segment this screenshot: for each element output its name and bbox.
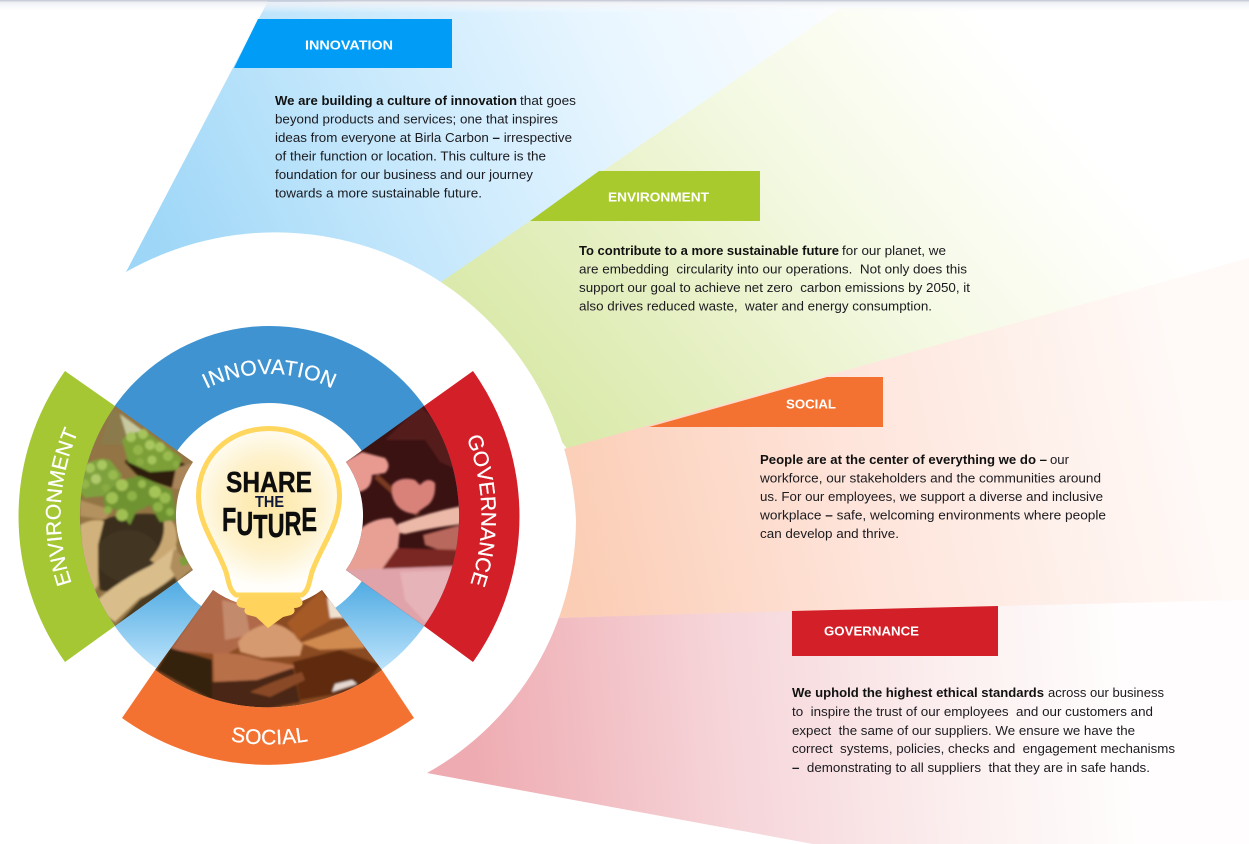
panel: social [649, 377, 1106, 541]
text block: innovation: ideas from everyone at Birla Carbon – irrespective [275, 130, 572, 145]
text block: governance: to inspire the trust of our employees and our customers and [792, 704, 1153, 719]
text block: governance: – demonstrating to all suppliers that they are in safe hands. [792, 760, 1150, 775]
text block: innovation: towards a more sustainable future. [275, 186, 482, 200]
band: environment: ENVIRONMENT [46, 426, 76, 586]
text block: social: People are at the center of everything we do – [760, 452, 1047, 467]
text block: environment: also drives reduced waste, water and energy consumption. [579, 298, 932, 314]
text block: governance: correct systems, policies, checks and engagement mechanisms [792, 741, 1176, 756]
heading: environment: ENVIRONMENT [608, 190, 709, 204]
text block: innovation: foundation for our business and our journey [275, 167, 534, 182]
band: social [122, 670, 414, 765]
text block: social: our [1050, 452, 1070, 467]
text block: governance [792, 685, 1176, 775]
text block: social: workplace – safe, welcoming environments where people [759, 508, 1106, 522]
text block: social: can develop and thrive. [760, 526, 899, 541]
top edge shadow [0, 2, 1249, 13]
bulb glass [198, 428, 340, 595]
beam: governance [427, 600, 1249, 844]
text block: innovation: of their function or location. This culture is the [275, 148, 546, 164]
text block: innovation: We are building a culture of innovation [275, 93, 517, 108]
heading: social [649, 377, 883, 427]
heading: governance [792, 606, 998, 656]
photo: seedlings in hands [80, 406, 193, 626]
wheel diagram [18, 326, 520, 765]
text block: innovation [275, 93, 577, 200]
photo: stacked hands [155, 590, 382, 708]
blue ring: innovation [80, 326, 460, 670]
panel: governance [792, 606, 1176, 775]
heading: governance: GOVERNANCE [824, 624, 919, 638]
text block: environment: are embedding circularity into our operations. Not only does this [579, 262, 968, 276]
band: governance: GOVERNANCE [468, 435, 496, 588]
panel: environment [530, 171, 970, 314]
text block: environment: To contribute to a more sustainable future [579, 243, 839, 258]
photo: hands with pen and tablet [346, 406, 459, 626]
text block: governance: We uphold the highest ethical standards [792, 685, 1044, 700]
heading: environment [530, 171, 760, 221]
text block: social: us. For our employees, we support a diverse and inclusive [760, 489, 1103, 504]
text block: social [759, 452, 1106, 541]
bulb base [236, 596, 302, 628]
text block: environment [579, 243, 970, 314]
top edge line [0, 0, 1249, 2]
text block: environment: for our planet, we [842, 243, 946, 258]
panel: innovation [234, 19, 577, 200]
text block: social: workforce, our stakeholders and the communities around [759, 470, 1101, 486]
white disc behind the wheel [0, 232, 576, 800]
band: environment [18, 371, 115, 662]
heading: innovation: INNOVATION [305, 38, 393, 52]
slogan: future: FUTURE [222, 502, 317, 546]
beam: environment [441, 8, 1249, 450]
text block: governance: across our business [1048, 685, 1164, 700]
text block: innovation: beyond products and services; one that inspires [275, 112, 558, 126]
beam: social [555, 258, 1249, 618]
text block: governance: expect the same of our suppliers. We ensure we have the [792, 723, 1135, 738]
blue ring: innovation: INNOVATION [202, 359, 337, 388]
heading: social: SOCIAL [786, 398, 836, 412]
icon: light bulb with slogan [198, 428, 340, 628]
beam: innovation [126, 1, 840, 282]
text block: innovation: that goes [520, 93, 577, 108]
heading: innovation [234, 19, 452, 68]
text block: environment: support our goal to achieve net zero carbon emissions by 2050, it [579, 280, 970, 295]
slogan: share: SHARE [226, 467, 312, 499]
band: social: SOCIAL [232, 727, 308, 745]
band: governance [424, 371, 520, 662]
slogan: the: THE [255, 494, 284, 511]
